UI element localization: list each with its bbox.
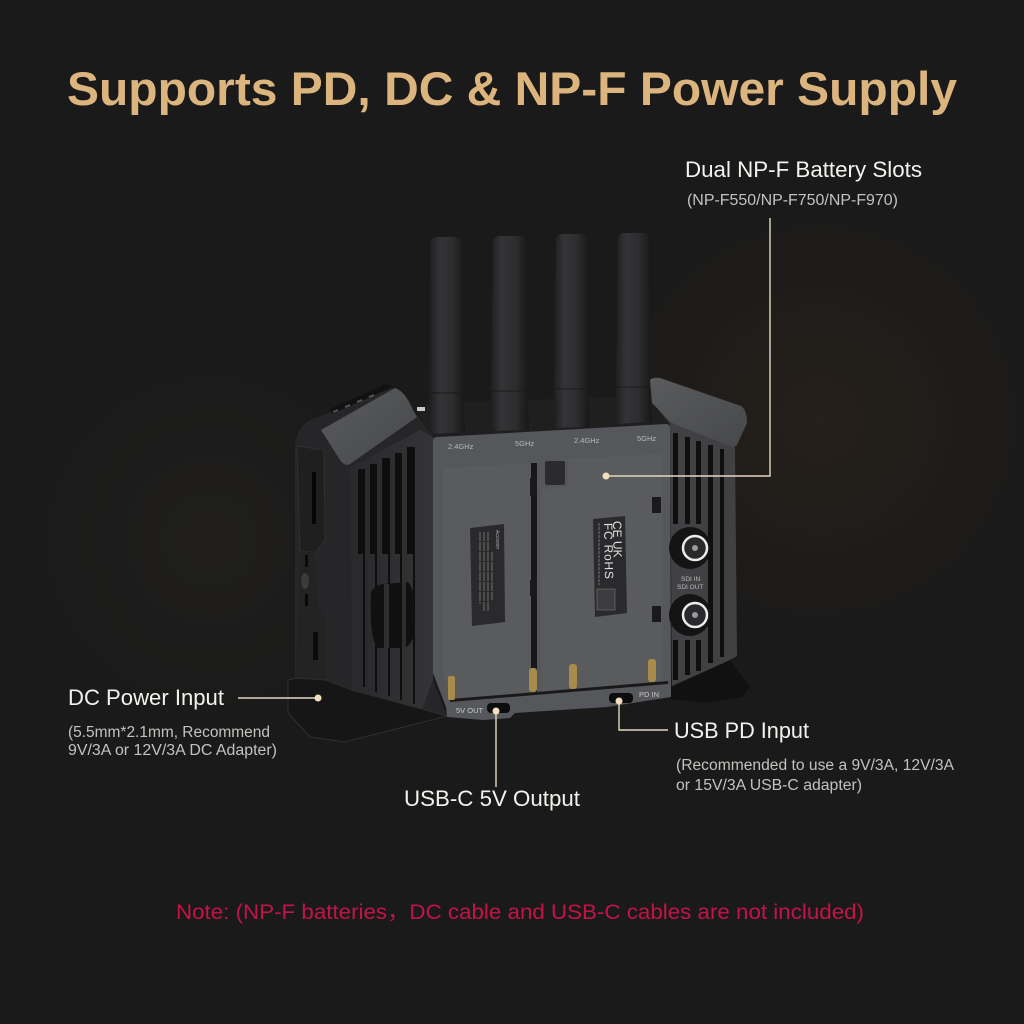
port labels and USB-C ports: 5V OUT [456, 706, 484, 715]
callout: DC power input: 9V/3A or 12V/3A DC Adapter) [68, 742, 277, 759]
right compliance label: CE UK [610, 521, 625, 558]
band labels [448, 434, 656, 451]
callout: USB-C 5V output: USB-C 5V Output [404, 786, 580, 811]
port labels and USB-C ports: PD IN [639, 690, 659, 699]
left product label [470, 524, 505, 626]
callout: USB PD input: USB PD Input [674, 718, 809, 743]
SDI connectors: SDI IN [681, 576, 700, 583]
right body [650, 378, 750, 703]
antennas [429, 233, 652, 434]
callout: USB PD input [616, 698, 955, 794]
callout: DC power input [68, 685, 322, 759]
callout: dual NP-F battery slots: Dual NP-F Battery Slots [685, 157, 922, 182]
battery slot recesses [443, 454, 668, 702]
gold pins [448, 659, 656, 700]
left body [288, 384, 447, 742]
rear bar behind antennas [417, 396, 672, 440]
SDI connectors: SDI OUT [677, 584, 703, 591]
rubber bumper [288, 678, 447, 742]
rear mounting plate [433, 424, 671, 720]
SDI connectors [669, 524, 711, 640]
device: monitor rear view [288, 233, 750, 742]
callout: dual NP-F battery slots: (NP-F550/NP-F750/NP-F970) [687, 192, 898, 209]
band labels: 5GHz [515, 439, 534, 448]
title: Supports PD, DC & NP-F Power Supply [67, 62, 957, 115]
band labels: 2.4GHz [574, 436, 600, 445]
right compliance label: FC RoHS [601, 523, 616, 579]
callout: USB-C 5V output [404, 708, 580, 811]
callout: USB PD input: or 15V/3A USB-C adapter) [676, 777, 862, 794]
callout: USB PD input: (Recommended to use a 9V/3A, 12V/3A [676, 757, 955, 774]
band labels: 5GHz [637, 434, 656, 443]
left product label: Accsoon [494, 530, 500, 549]
band labels: 2.4GHz [448, 442, 474, 451]
callout: dual NP-F battery slots [602, 157, 922, 480]
note: Note: (NP-F batteries，DC cable and USB-C cables are not included) [176, 901, 864, 924]
callout: DC power input: DC Power Input [68, 685, 224, 710]
callout: DC power input: (5.5mm*2.1mm, Recommend [68, 724, 270, 741]
right compliance label [593, 516, 627, 617]
port labels and USB-C ports [456, 690, 659, 715]
